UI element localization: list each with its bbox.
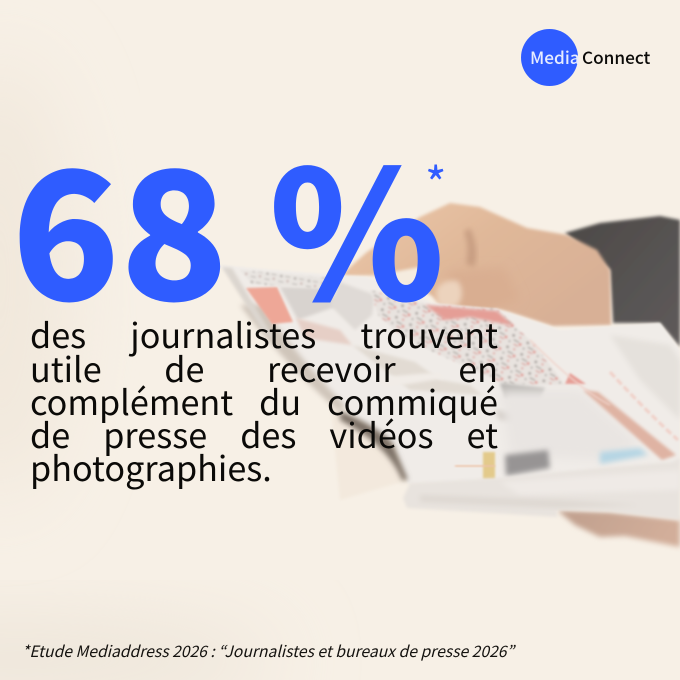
small grey text lines right page: [610, 335, 680, 420]
page under side: [222, 267, 408, 500]
body text: complément du commiqué: [30, 375, 498, 425]
logo word Media: Media: [530, 44, 580, 69]
lower hand: [557, 510, 680, 547]
grey stripes: [352, 345, 482, 395]
body text: utile de recevoir en: [30, 342, 498, 392]
salmon band: [583, 390, 676, 460]
sleeve: [565, 216, 680, 347]
page stack: [403, 458, 680, 520]
body text: des journalistes trouvent: [30, 308, 498, 358]
magazine: [220, 265, 680, 520]
blurred white photo: [500, 390, 640, 460]
big statistic 68 %: 68 %: [12, 95, 445, 352]
red label top left: [246, 287, 293, 324]
busy speckled page: [370, 290, 565, 385]
logo blue disc: [521, 29, 578, 86]
asterisk: *: [425, 149, 446, 215]
body text: photographies.: [30, 441, 272, 491]
footnote: *Etude Mediaddress 2026 : “Journalistes et bureaux de presse 2026”: [22, 639, 514, 662]
hand: [340, 203, 611, 326]
logo: Media Connect: [521, 29, 650, 86]
photo blocks bottom: [483, 452, 495, 479]
body text: de presse des vidéos et: [30, 408, 498, 458]
curved dark page edge: [340, 411, 408, 480]
logo word Connect: Connect: [582, 44, 650, 69]
